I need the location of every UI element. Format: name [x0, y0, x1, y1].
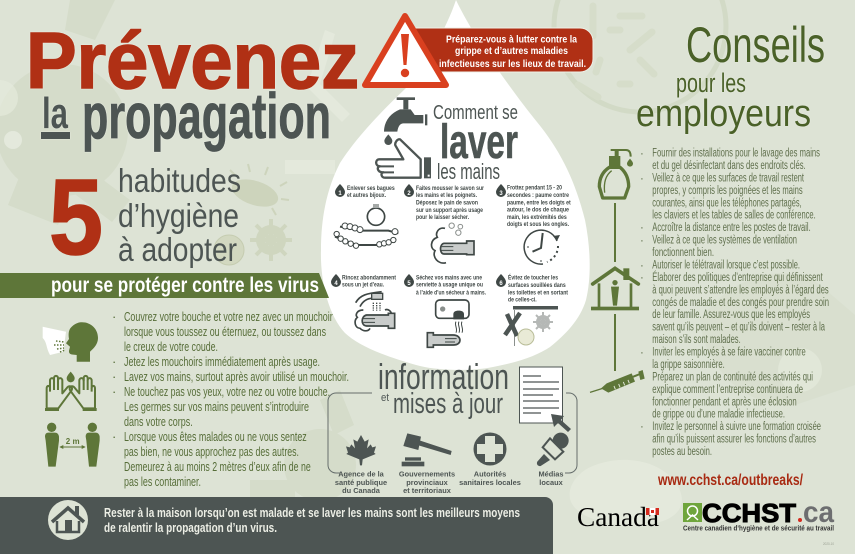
right bullet list: maison s’ils sont malades.	[652, 334, 741, 346]
right bullet list: ·	[640, 235, 644, 247]
right bullet list: fonctionnent bien.	[652, 247, 714, 259]
icon: ring and bracelet	[334, 204, 398, 248]
title: Conseils pour les employeurs: pour les	[676, 68, 746, 98]
edition code: 2020-10	[823, 542, 834, 546]
right bullet list: la grippe saisonnière.	[652, 359, 725, 371]
left bullet list: Les germes sur vos mains peuvent s’introduire	[124, 399, 309, 414]
information sources labels: et territoriaux	[403, 486, 452, 495]
CCHST logo	[683, 496, 834, 532]
left icon: coughing into tissue	[43, 322, 98, 362]
step 2	[404, 184, 484, 263]
title: la propagation: propagation	[82, 80, 331, 152]
step 6: surfaces souillées dans	[508, 282, 566, 289]
step 1: 1	[338, 191, 342, 197]
information sources labels: locaux	[539, 478, 564, 487]
left bullet list: pas bien, ne vous approchez pas des autres.	[124, 444, 299, 459]
step 3: main, les extrémités des	[507, 214, 567, 221]
heading: information et mises à jour: et	[381, 392, 389, 404]
step 5: serviette à usage unique ou	[416, 282, 483, 288]
step 1: et autres bijoux.	[347, 192, 386, 199]
left bullet list: Ne touchez pas vos yeux, votre nez ou votre bouche.	[124, 384, 330, 399]
heading: information et mises à jour: mises à jour	[393, 388, 503, 420]
website url: www.cchst.ca/outbreaks/	[657, 472, 803, 489]
icon: faucet	[384, 97, 427, 145]
right bullet list: ·	[640, 272, 644, 284]
step 5: 5	[407, 281, 411, 287]
green banner: pour se protéger contre les virus	[51, 274, 319, 297]
big number 5: 5	[49, 156, 103, 277]
right bullet list: ·	[640, 347, 644, 359]
heading: habitudes d'hygiène à adopter: habitudes	[118, 162, 241, 199]
step 3: 3	[499, 191, 503, 197]
icon: house in circle	[48, 500, 88, 540]
step 4: Rincez abondamment	[342, 274, 397, 282]
information sources labels: Gouvernements	[399, 470, 455, 478]
icon: house with person	[591, 268, 639, 310]
step 6: 6	[499, 281, 503, 287]
information sources labels: Agence de la	[338, 470, 385, 478]
information sources labels	[335, 470, 564, 495]
step 3: autour, le dos de chaque	[507, 206, 569, 214]
step 4: sous un jet d’eau.	[342, 282, 384, 288]
icon: rinsing hands	[355, 292, 395, 331]
right bullet list: ·	[640, 173, 644, 185]
icon: maple leaf	[346, 435, 376, 465]
heading: habitudes d'hygiène à adopter: à adopter	[118, 231, 237, 268]
step 6: Évitez de toucher les	[508, 272, 558, 282]
step 2: les mains et les poignets.	[416, 192, 477, 199]
heading: Comment se laver les mains: laver	[440, 116, 518, 169]
heading: habitudes d'hygiène à adopter	[118, 162, 241, 268]
right bullet list: ·	[640, 148, 644, 160]
white water drop	[321, 0, 590, 370]
step 2: sur un support après usage	[416, 207, 483, 214]
connector line	[614, 203, 616, 262]
icon: hand dryer	[427, 300, 469, 347]
icon: microphone	[537, 433, 569, 466]
left bullet list: lorsque vous toussez ou éternuez, ou toussez dans	[124, 324, 326, 339]
left bullet list: Demeurez à au moins 2 mètres d’eux afin de ne	[124, 459, 311, 474]
left bullet list: Jetez les mouchoirs immédiatement après usage.	[124, 354, 320, 369]
step 5	[404, 274, 486, 347]
step 1	[334, 184, 398, 248]
icon: clock	[524, 230, 560, 264]
information sources labels: santé publique	[335, 478, 387, 487]
step 2: Déposez le pain de savon	[416, 200, 478, 206]
left bullet list: ·	[112, 384, 116, 399]
title: Conseils pour les employeurs: employeurs	[636, 93, 811, 135]
left bullet list: le creux de votre coude.	[124, 339, 218, 354]
red callout box: infectieuses sur les lieux de travail.	[439, 58, 586, 70]
left bullet list: Lavez vos mains, surtout après avoir utilisé un mouchoir.	[124, 369, 349, 384]
title: la propagation: la	[42, 89, 68, 138]
step 3	[496, 184, 571, 264]
icon: warning triangle	[365, 16, 446, 85]
Canada wordmark: Canada	[577, 502, 659, 532]
icon: gavel	[402, 433, 452, 466]
icon: hand	[376, 139, 431, 178]
step 4	[331, 274, 397, 331]
heading: habitudes d'hygiène à adopter: d’hygiène	[118, 197, 239, 234]
banner message	[104, 506, 520, 535]
step 5: à l’aide d’un sécheur à mains.	[416, 290, 486, 296]
step 6	[496, 272, 569, 346]
left bullet list: pas les contaminer.	[124, 474, 201, 489]
left bullet list: ·	[112, 369, 116, 384]
heading: Comment se laver les mains: Comment se	[433, 102, 518, 124]
step 5: Séchez vos mains avec une	[416, 274, 482, 282]
bottom dark banner	[0, 497, 553, 554]
step 3: secondes : paume contre	[507, 192, 569, 199]
left icon: two metre distance	[45, 423, 100, 467]
right bullet list: de grippe ou d’une maladie infectieuse.	[652, 409, 785, 421]
right bullet list: ·	[640, 222, 644, 234]
red callout box: Préparez-vous à lutter contre la	[446, 34, 577, 46]
step 2: Faites mousser le savon sur	[416, 185, 484, 192]
deco: virus icons near the heading	[214, 164, 292, 265]
step 6: de celles-ci.	[508, 296, 537, 304]
information sources labels: Médias	[538, 470, 564, 478]
icon: medical cross	[474, 432, 506, 466]
banner message: de ralentir la propagation d’un virus.	[104, 521, 277, 535]
icon: door handle with germs	[505, 306, 558, 346]
left bullet list: ·	[112, 429, 116, 444]
icon: syringe	[590, 370, 645, 393]
left bullet list: Lorsque vous êtes malades ou ne vous sentez	[124, 429, 307, 444]
icon: document with cursor	[520, 367, 571, 432]
CCHST logo: ca	[803, 496, 834, 529]
step 3: doigts et sous les ongles.	[507, 221, 569, 228]
step 2: pour le laisser sécher.	[416, 214, 469, 221]
right bullet list: ·	[640, 421, 644, 433]
title: Conseils pour les employeurs	[636, 17, 825, 135]
title: Prévenez: Prévenez	[26, 16, 359, 105]
step 2: 2	[407, 191, 411, 197]
banner message: Rester à la maison lorsqu’on est malade et se laver les mains sont les meilleurs moyens	[104, 506, 520, 520]
heading: information et mises à jour	[378, 356, 509, 420]
connector line	[614, 314, 616, 371]
red callout box	[415, 28, 593, 72]
left bullet list: ·	[112, 354, 116, 369]
information sources labels: Autorités	[474, 470, 506, 478]
left bullet list: Couvrez votre bouche et votre nez avec un mouchoir	[124, 309, 333, 324]
heading: Comment se laver les mains	[433, 102, 518, 184]
icon: soap dispenser	[599, 150, 633, 198]
left bullet list: dans votre corps.	[124, 414, 193, 429]
step 3: Frottez pendant 15 - 20	[507, 184, 562, 192]
information sources labels: sanitaires locales	[459, 478, 521, 487]
right bullet list	[640, 148, 829, 458]
icon: soapy hand	[431, 223, 474, 263]
CCHST logo: CCHST	[702, 498, 796, 528]
step 1: Enlever ses bagues	[347, 185, 395, 192]
green banner	[0, 273, 329, 298]
heading: Comment se laver les mains: les mains	[437, 159, 500, 184]
information sources labels: du Canada	[342, 486, 381, 495]
left icon: two metre distance: 2 m	[66, 437, 80, 446]
step 4: 4	[334, 281, 338, 287]
information sources labels: provinciaux	[406, 478, 449, 487]
step 3: paume, entre les doigts et	[507, 200, 571, 206]
right bullet list: ·	[640, 260, 644, 272]
title: la propagation	[41, 80, 331, 152]
left icon: hands with drop	[45, 372, 97, 411]
left bullet list	[112, 309, 349, 489]
information section bracket	[328, 393, 577, 473]
step 6: les toilettes et en sortant	[508, 290, 569, 296]
heading: information et mises à jour: information	[378, 356, 509, 397]
left bullet list: ·	[112, 309, 116, 324]
right bullet list: postes au besoin.	[652, 446, 712, 458]
red callout box: grippe et d’autres maladies	[455, 45, 568, 57]
